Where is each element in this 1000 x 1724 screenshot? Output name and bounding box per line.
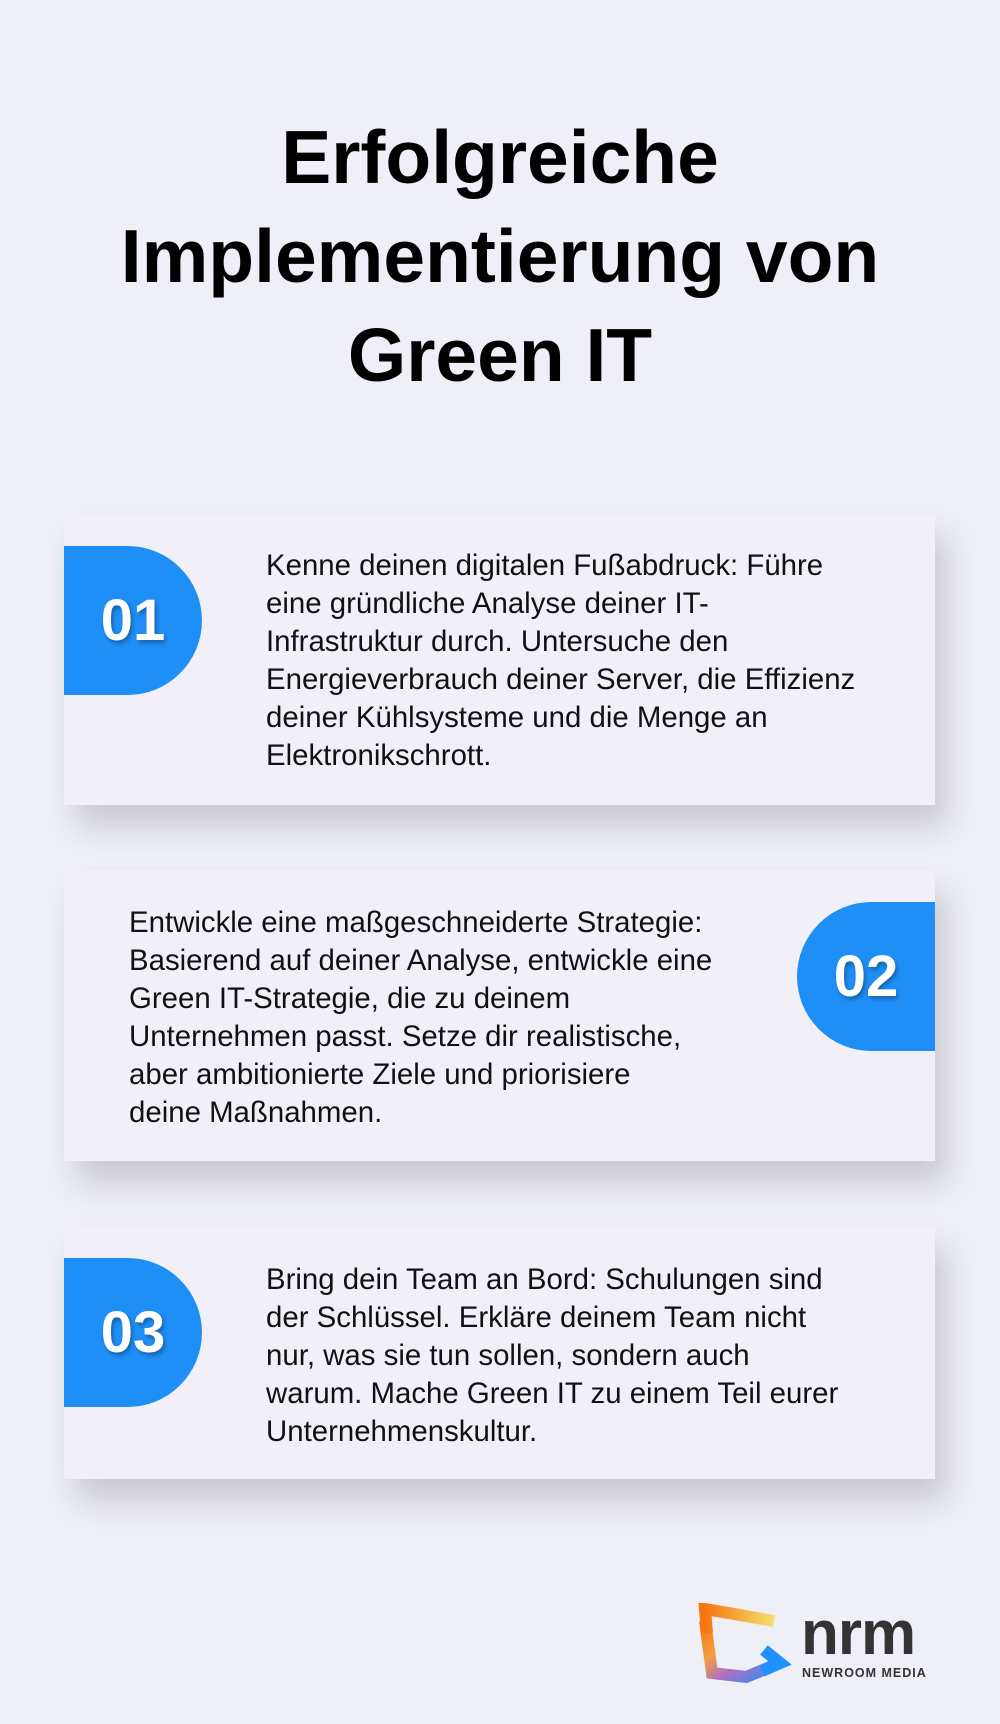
- text 01: [266, 549, 855, 772]
- card 01: [64, 514, 935, 805]
- text 02: Green IT-Strategie, die zu deinem: [129, 982, 570, 1015]
- text 01: Kenne deinen digitalen Fußabdruck: Führe: [266, 549, 823, 582]
- title: Erfolgreiche: [281, 115, 719, 199]
- text 03: Unternehmenskultur.: [266, 1415, 537, 1448]
- text 02: deine Maßnahmen.: [129, 1096, 382, 1129]
- text 01: deiner Kühlsysteme und die Menge an: [266, 701, 768, 734]
- text 01: Infrastruktur durch. Untersuche den: [266, 625, 728, 658]
- card 03: [64, 1226, 935, 1479]
- badge 02: 02: [834, 944, 898, 1009]
- badge 03: [64, 1258, 202, 1407]
- text 03: [266, 1263, 838, 1448]
- icon: logo mark: [698, 1603, 792, 1684]
- text 02: [129, 906, 712, 1129]
- card 02: [64, 870, 935, 1161]
- logo text: nrm: [801, 1599, 915, 1668]
- text 01: Energieverbrauch deiner Server, die Effizienz: [266, 663, 855, 696]
- badge 02: [797, 902, 935, 1051]
- text 02: Entwickle eine maßgeschneiderte Strategie:: [129, 906, 702, 939]
- text 02: Basierend auf deiner Analyse, entwickle eine: [129, 944, 712, 977]
- title: [121, 115, 879, 397]
- text 03: warum. Mache Green IT zu einem Teil eurer: [266, 1377, 838, 1410]
- badge 03: 03: [101, 1300, 165, 1365]
- badge 01: [64, 546, 202, 695]
- badge 01: 01: [101, 588, 165, 653]
- text 01: Elektronikschrott.: [266, 739, 491, 772]
- logo: NEWROOM MEDIA: [802, 1666, 927, 1680]
- text 03: nur, was sie tun sollen, sondern auch: [266, 1339, 750, 1372]
- text 02: Unternehmen passt. Setze dir realistische,: [129, 1020, 681, 1053]
- text 03: Bring dein Team an Bord: Schulungen sind: [266, 1263, 823, 1296]
- text 03: der Schlüssel. Erkläre deinem Team nicht: [266, 1301, 806, 1334]
- text 01: eine gründliche Analyse deiner IT-: [266, 587, 709, 620]
- text 02: aber ambitionierte Ziele und priorisiere: [129, 1058, 631, 1091]
- title: Implementierung von: [121, 214, 879, 298]
- title: Green IT: [348, 313, 652, 397]
- logo: [698, 1599, 927, 1684]
